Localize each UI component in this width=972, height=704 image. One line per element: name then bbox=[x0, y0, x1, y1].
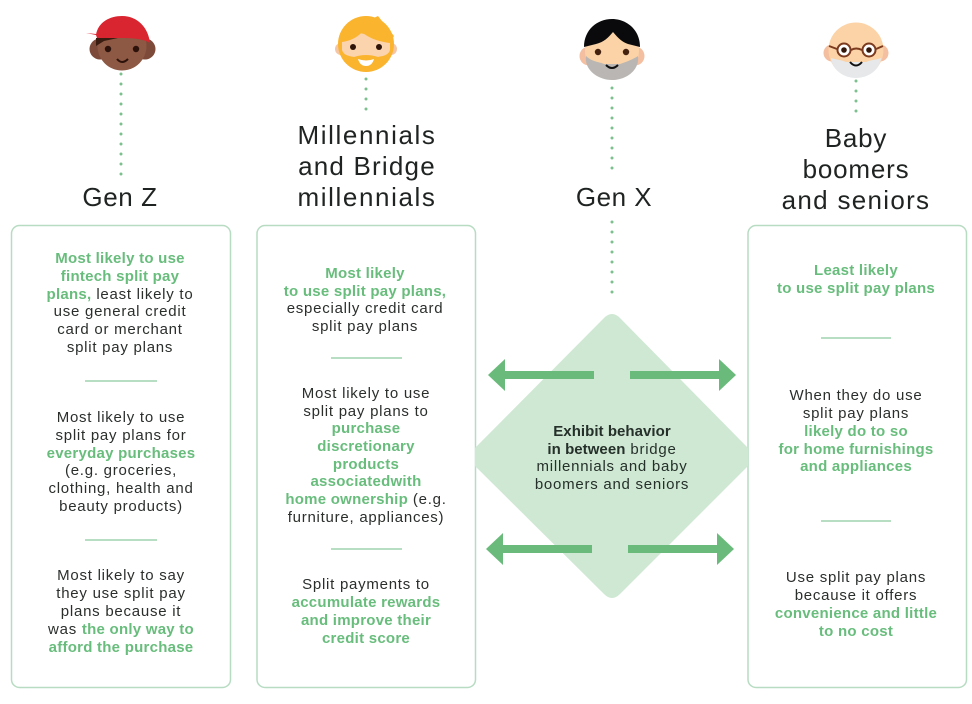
panel: Gen Z bbox=[12, 226, 230, 688]
heading: Millennials and Bridge millennials: Millennials bbox=[298, 120, 436, 150]
text: most likely to use split pay: to use split pay plans, bbox=[284, 283, 446, 300]
arrow: bottom right bbox=[628, 533, 734, 565]
text: discretionary products: Most likely to use bbox=[302, 385, 430, 402]
text: everyday purchases: (e.g. groceries, bbox=[65, 462, 177, 479]
text: most likely to use split pay: Most likely bbox=[325, 265, 405, 282]
text: everyday purchases: everyday purchases bbox=[47, 445, 195, 462]
text: least likely: Least likely bbox=[814, 262, 898, 279]
text: fintech split pay: plans, least likely to bbox=[47, 286, 193, 303]
text: fintech split pay: card or merchant bbox=[57, 321, 183, 338]
heading: Millennials and Bridge millennials bbox=[298, 120, 436, 212]
text: fintech split pay: fintech split pay bbox=[61, 268, 180, 285]
heading: Millennials and Bridge millennials: millennials bbox=[298, 182, 436, 212]
connector dots bbox=[121, 74, 856, 300]
text: least likely: to use split pay plans bbox=[777, 280, 935, 297]
panel: Millennials bbox=[257, 226, 476, 688]
text: discretionary products: products bbox=[333, 456, 399, 473]
text: most likely to use split pay: split pay plans bbox=[312, 318, 418, 335]
text: convenience: because it offers bbox=[795, 587, 917, 604]
text: discretionary products: furniture, appliances) bbox=[288, 509, 444, 526]
arrow: top left bbox=[488, 359, 594, 391]
text: accumulate rewards: Split payments to bbox=[302, 576, 430, 593]
text: home furnishings: split pay plans bbox=[803, 405, 909, 422]
text: everyday purchases: Most likely to use bbox=[57, 409, 185, 426]
text: home furnishings: When they do use bbox=[790, 387, 922, 404]
text: convenience: to no cost bbox=[819, 623, 893, 640]
text: fintech split pay: Most likely to use bbox=[55, 250, 185, 267]
text: exhibit behavior: Exhibit behavior bbox=[553, 423, 671, 440]
text: most likely to use split pay: especially credit card bbox=[287, 300, 443, 317]
text: accumulate rewards: credit score bbox=[322, 630, 410, 647]
text: only way to afford: they use split pay bbox=[56, 585, 186, 602]
text: everyday purchases: split pay plans for bbox=[56, 427, 186, 444]
heading: Baby boomers and seniors: boomers bbox=[803, 154, 909, 184]
icon: Boomer avatar bbox=[824, 22, 888, 78]
heading: Baby boomers and seniors: and seniors bbox=[782, 185, 930, 215]
text: only way to afford: Most likely to say bbox=[57, 567, 185, 584]
text: exhibit behavior: boomers and seniors bbox=[535, 476, 689, 493]
text: fintech split pay: use general credit bbox=[54, 303, 186, 320]
text: exhibit behavior: in between bridge bbox=[547, 441, 677, 458]
panel: Gen X diamond bbox=[475, 314, 748, 598]
text: home furnishings: likely do to so bbox=[804, 423, 908, 440]
text: only way to afford: was the only way to bbox=[48, 621, 194, 638]
text: home furnishings: for home furnishings bbox=[778, 441, 934, 458]
text: discretionary products: split pay plans to bbox=[303, 403, 429, 420]
icon: Gen Z avatar bbox=[86, 16, 156, 70]
text: discretionary products: associatedwith bbox=[310, 473, 422, 490]
heading: Baby boomers and seniors bbox=[782, 123, 930, 215]
text: home furnishings: and appliances bbox=[800, 458, 912, 475]
heading: Gen X: Gen X bbox=[576, 182, 652, 212]
arrow: bottom left bbox=[486, 533, 592, 565]
text: only way to afford: afford the purchase bbox=[49, 639, 193, 656]
text: everyday purchases: beauty products) bbox=[59, 498, 183, 515]
text: discretionary products: purchase bbox=[332, 420, 400, 437]
icon: Millennial avatar bbox=[335, 16, 397, 72]
text: everyday purchases: clothing, health and bbox=[48, 480, 194, 497]
text: discretionary products: discretionary bbox=[317, 438, 415, 455]
panel: Baby boomers and seniors bbox=[748, 226, 966, 688]
heading: Gen Z: Gen Z bbox=[82, 182, 158, 212]
text: exhibit behavior: millennials and baby bbox=[537, 458, 687, 475]
text: accumulate rewards: and improve their bbox=[301, 612, 431, 629]
text: convenience: Use split pay plans bbox=[786, 569, 926, 586]
text: fintech split pay: split pay plans bbox=[67, 339, 173, 356]
heading: Baby boomers and seniors: Baby bbox=[825, 123, 887, 153]
text: convenience: convenience and little bbox=[775, 605, 937, 622]
icon: Gen X avatar bbox=[580, 19, 644, 80]
text: accumulate rewards: accumulate rewards bbox=[292, 594, 440, 611]
text: only way to afford: plans because it bbox=[61, 603, 181, 620]
heading: Millennials and Bridge millennials: and Bridge bbox=[298, 151, 436, 181]
text: discretionary products: home ownership (e.g. bbox=[285, 491, 447, 508]
arrow: top right bbox=[630, 359, 736, 391]
